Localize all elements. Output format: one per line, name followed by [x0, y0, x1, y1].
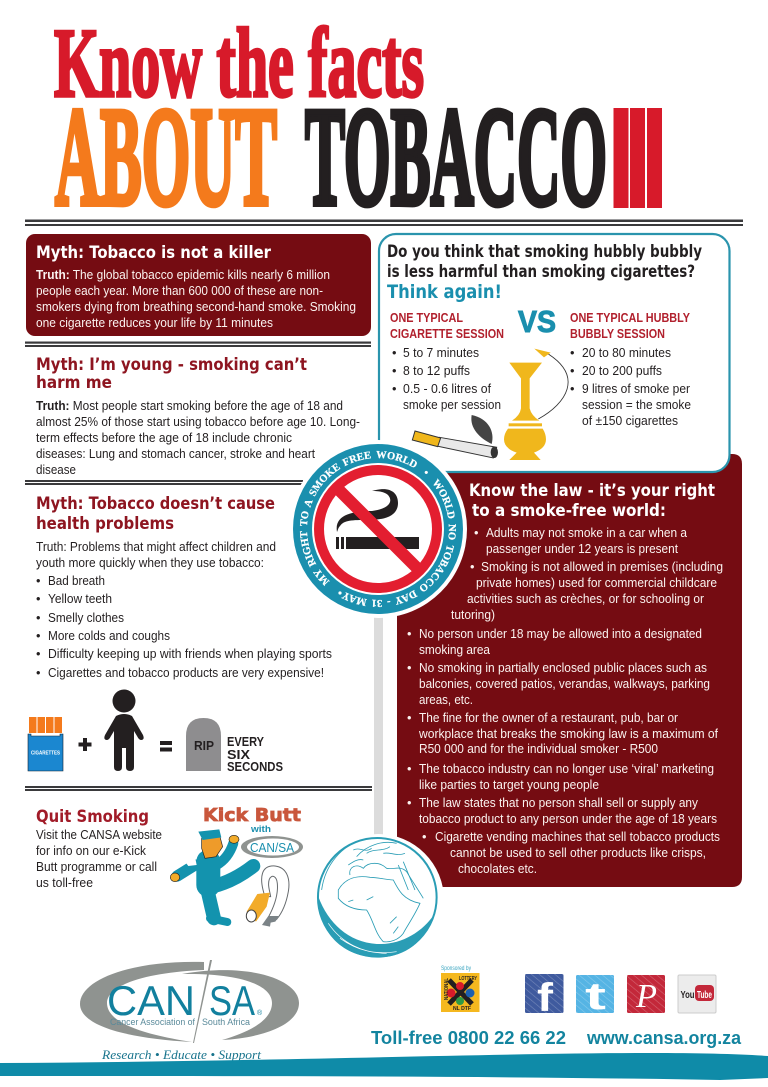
icon: national lottery logo: NATIONAL [444, 978, 450, 1000]
heading: health problems [36, 514, 174, 533]
body text [36, 827, 162, 890]
cigarette session column: ONE TYPICAL [390, 310, 463, 325]
heading: Quit Smoking [36, 807, 149, 826]
truth text: smokers dying from breathing second-hand smoke. Smoking [36, 299, 356, 314]
bullet list: Yellow teeth [48, 591, 112, 606]
truth text: one cigarette reduces your life by 11 minutes [36, 315, 273, 330]
cigarette session column: • [392, 345, 396, 360]
icon: youtube: You [680, 990, 694, 1001]
law list: cannot be used to sell other products like crisps, [450, 845, 706, 860]
law list: • [407, 795, 411, 810]
title [54, 9, 662, 235]
cigarette session column: 8 to 12 puffs [403, 363, 470, 378]
kick butt wordmark: Kick Butt [203, 805, 301, 826]
cigarette session column: • [392, 381, 396, 396]
bullet list: • [36, 573, 40, 588]
law list: • [422, 829, 426, 844]
heading: to a smoke-free world: [472, 501, 666, 520]
law list: • [474, 525, 478, 540]
hubbly session column: session = the smoke [582, 397, 691, 412]
question heading [387, 242, 702, 281]
icon: youtube: Tube [697, 990, 712, 1001]
truth text: youth more quickly when they use tobacco: [36, 555, 264, 570]
body text: for info on our e-Kick [36, 843, 147, 858]
cigarette glyph [336, 489, 419, 549]
truth text [36, 267, 356, 330]
law list: The fine for the owner of a restaurant, pub, bar or [419, 710, 679, 725]
law list: tutoring) [451, 607, 495, 622]
heading [36, 494, 275, 533]
bullet list: Bad breath [48, 573, 105, 588]
law list: • [407, 710, 411, 725]
pole [374, 600, 383, 840]
icon: cigarette pack [28, 717, 63, 771]
caption: every six seconds: SECONDS [227, 759, 283, 774]
law list [407, 525, 723, 876]
caption: every six seconds: EVERY [227, 734, 264, 749]
heading: harm me [36, 373, 112, 392]
cansa tagline: South Africa [202, 1017, 250, 1027]
hubbly session column: • [570, 381, 574, 396]
cigarette session column [390, 310, 504, 412]
caption: every six seconds: SIX [227, 747, 250, 762]
truth text: people each year. More than 600 000 of these are non- [36, 283, 323, 298]
title line: Know the facts: Know the facts [54, 9, 424, 118]
ring text: MY RIGHT TO A SMOKE FREE WORLD • WORLD NO TOBACCO DAY - 31 MAY [300, 450, 456, 608]
footer wave band [0, 1053, 768, 1080]
hubbly session column: • [570, 345, 574, 360]
bullet list: • [36, 646, 40, 661]
truth text: Truth: The global tobacco epidemic kills nearly 6 million [36, 267, 330, 282]
truth text [36, 398, 360, 477]
icon: cigarette pack: CIGARETTES [31, 750, 60, 756]
vs: VS [518, 304, 556, 339]
panel: hubbly bubbly comparison [379, 234, 730, 472]
truth text: almost 25% of those start using tobacco before age 10. Long- [36, 414, 360, 429]
cansa tagline [110, 1017, 250, 1027]
slash [337, 488, 419, 570]
hubbly session column [570, 310, 691, 428]
hubbly session column: BUBBLY SESSION [570, 326, 665, 341]
law list: • [407, 626, 411, 641]
icon: world no tobacco day sign [293, 440, 467, 618]
logo: kick butt with cansa [170, 805, 303, 927]
law list: like parties to target young people [419, 777, 599, 792]
heading: Myth: Tobacco doesn’t cause [36, 494, 275, 513]
icon: pinterest [627, 975, 665, 1015]
law list: activities such as crèches, or for schooling or [467, 591, 705, 606]
icon: hookah [504, 349, 568, 460]
bullet list: More colds and coughs [48, 628, 170, 643]
equals sign [160, 741, 172, 752]
cansa wordmark [107, 977, 263, 1024]
icon: youtube [678, 975, 716, 1013]
mini cansa logo: CAN/SA [250, 840, 294, 855]
icon: person [104, 690, 144, 771]
bullet list: • [36, 665, 40, 680]
heading [469, 481, 715, 520]
law list: workplace that breaks the smoking law is a maximum of [418, 726, 718, 741]
icon: twitter: t [585, 976, 607, 1018]
bullet list: • [36, 628, 40, 643]
cansa wordmark: ® [257, 1009, 263, 1017]
mascot hands [170, 835, 239, 882]
cigarette session column: CIGARETTE SESSION [390, 326, 504, 341]
icon: burning cigarette [412, 415, 498, 458]
contact line [371, 1028, 742, 1048]
title: ABOUT [55, 79, 277, 235]
hubbly session column: ONE TYPICAL HUBBLY [570, 310, 690, 325]
law list: The law states that no person shall sell or supply any [419, 795, 699, 810]
icon: globe [318, 838, 437, 957]
title bars [614, 108, 662, 208]
cansa wordmark: CAN [107, 977, 195, 1024]
bullet list [36, 573, 332, 680]
icon: facebook: f [537, 976, 554, 1020]
cansa tagline: Cancer Association of [110, 1017, 195, 1027]
panel: myth tobacco is not a killer [26, 234, 371, 336]
truth text [36, 539, 276, 570]
cigarette session column: • [392, 363, 396, 378]
law list: chocolates etc. [458, 861, 537, 876]
cansa wordmark: SA [209, 977, 255, 1024]
icon: mascot kicking cigarette butt [170, 829, 289, 927]
equation: cigarettes plus person equals death every six seconds [28, 690, 283, 774]
logo: cansa [80, 960, 299, 1043]
with: with [250, 824, 271, 834]
social icons [525, 974, 716, 1020]
icon: tombstone: RIP [194, 738, 214, 753]
hubbly session column: 20 to 200 puffs [582, 363, 662, 378]
bullet list: Smelly clothes [48, 610, 124, 625]
icon: national lottery logo: NL DTF [453, 1006, 471, 1012]
plus sign [78, 738, 92, 751]
hubbly session column: 9 litres of smoke per [582, 381, 691, 396]
hubbly session column: 20 to 80 minutes [582, 345, 671, 360]
truth text: term effects before the age of 18 include chronic [36, 430, 293, 445]
bullet list: Difficulty keeping up with friends when playing sports [48, 646, 332, 661]
truth text: Truth: Problems that might affect children and [36, 539, 276, 554]
sponsored by lottery [441, 966, 480, 1012]
icon: facebook [525, 974, 564, 1020]
mascot limbs and torso [177, 843, 253, 922]
body text: us toll-free [36, 875, 93, 890]
icon: national lottery logo [441, 973, 480, 1012]
law list: • [407, 761, 411, 776]
panel: know the law [397, 454, 742, 887]
law list: private homes) used for commercial childcare [476, 575, 717, 590]
panel: myth young [36, 355, 360, 477]
law list: areas, etc. [419, 692, 473, 707]
bullet list: • [36, 591, 40, 606]
panel: myth health problems [36, 494, 332, 680]
question heading: is less harmful than smoking cigarettes? [387, 262, 695, 281]
cigarette session column: smoke per session [403, 397, 501, 412]
body text: Butt programme or call [36, 859, 157, 874]
question heading: Do you think that smoking hubbly bubbly [387, 242, 702, 261]
bullet list: • [36, 610, 40, 625]
law list: Smoking is not allowed in premises (including [481, 559, 723, 574]
law list: No person under 18 may be allowed into a designated [419, 626, 702, 641]
law list: • [407, 660, 411, 675]
heading: Know the law - it’s your right [469, 481, 715, 500]
law list: No smoking in partially enclosed public places such as [419, 660, 707, 675]
cigarette session column: 5 to 7 minutes [403, 345, 479, 360]
law list: passenger under 12 years is present [486, 541, 678, 556]
icon: pinterest: P [635, 978, 657, 1015]
icon: twitter [576, 975, 614, 1018]
truth text: disease [36, 462, 76, 477]
icon: tombstone [186, 718, 221, 771]
bullet list: Cigarettes and tobacco products are very expensive! [48, 665, 324, 680]
panel: quit smoking [36, 807, 162, 890]
body text: Visit the CANSA website [36, 827, 162, 842]
law list: Adults may not smoke in a car when a [486, 525, 688, 540]
law list: The tobacco industry can no longer use ‘viral’ marketing [419, 761, 714, 776]
law list: • [470, 559, 474, 574]
caption: every six seconds [227, 734, 283, 774]
heading [36, 355, 307, 392]
law list: tobacco product to any person under the age of 18 years [419, 811, 717, 826]
mascot face [202, 837, 223, 858]
sponsored by lottery: Sponsored by [441, 966, 471, 972]
law list: Cigarette vending machines that sell tobacco products [435, 829, 720, 844]
mascot hat [198, 829, 221, 840]
law list: smoking area [419, 642, 491, 657]
hubbly session column: • [570, 363, 574, 378]
slogan: Research • Educate • Support [101, 1047, 261, 1062]
icon: national lottery logo: LOTTERY [459, 976, 478, 982]
truth text: Truth: Most people start smoking before the age of 18 and [36, 398, 343, 413]
heading: Myth: I’m young - smoking can’t [36, 355, 307, 374]
heading: Myth: Tobacco is not a killer [36, 243, 272, 262]
contact line: Toll-free 0800 22 66 22 [371, 1028, 566, 1048]
sleeve badge [185, 857, 197, 866]
cigarette butt [246, 866, 289, 927]
law list: balconies, covered patios, verandas, walkways, parking [419, 676, 710, 691]
law list: R50 000 and for the individual smoker - R500 [419, 741, 658, 756]
think again: Think again! [387, 281, 502, 303]
contact line: www.cansa.org.za [586, 1028, 742, 1048]
cigarette session column: 0.5 - 0.6 litres of [403, 381, 491, 396]
hubbly session column: of ±150 cigarettes [582, 413, 678, 428]
truth text: diseases: Lung and stomach cancer, stroke and heart [36, 446, 315, 461]
